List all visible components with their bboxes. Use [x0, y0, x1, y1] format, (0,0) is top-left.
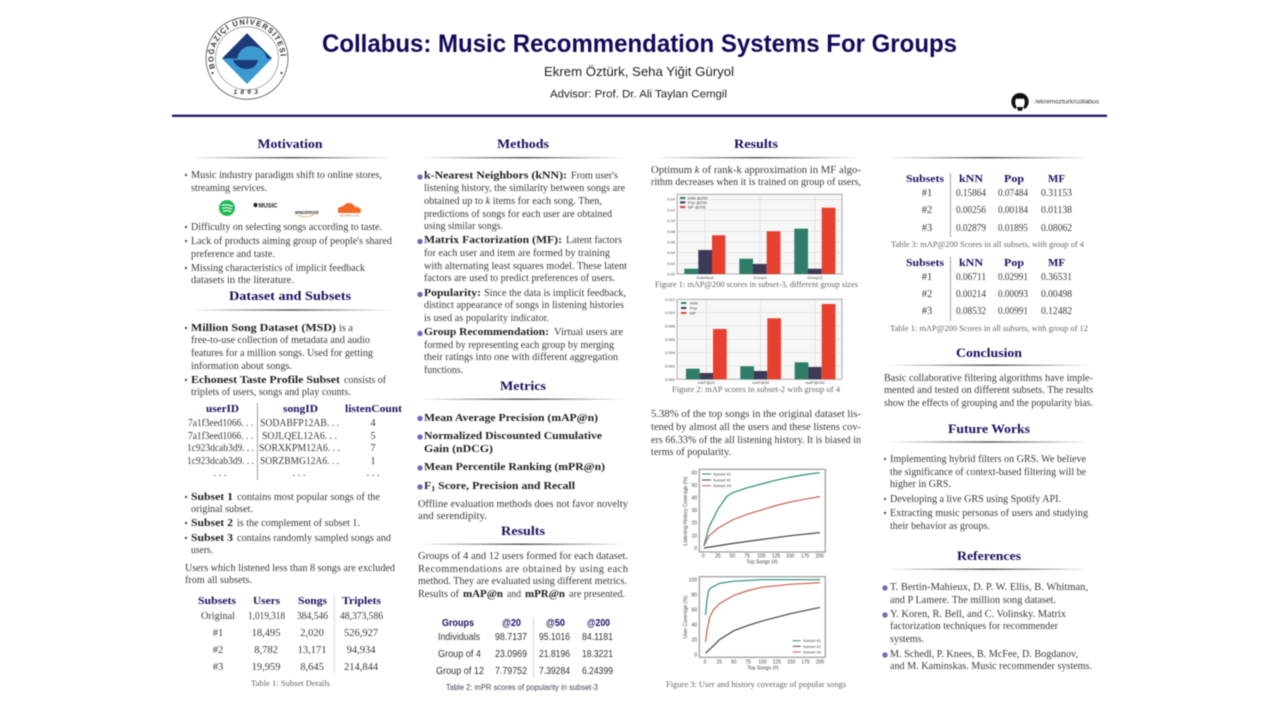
- text block: motivation bullets: [185, 170, 393, 286]
- heading: Motivation: Motivation: [258, 137, 323, 151]
- caption: table 1: Table 1: Subset Details: [251, 678, 330, 688]
- table: triplets sample: 5: [370, 431, 376, 442]
- line chart: user coverage: 100: [689, 578, 697, 584]
- table: subset details: 48,373,586: [340, 611, 383, 622]
- text block: results summary: [418, 551, 629, 600]
- bar chart: figure 1: Individual: [697, 275, 714, 280]
- panel: column 4: [882, 157, 1093, 672]
- caption: figure 1: Figure 1: mAP@200 scores in subset-3, different group sizes: [655, 279, 858, 289]
- bar chart: figure 2: 0.000: [665, 377, 676, 382]
- table: mAP scores group of 12: 0.00498: [1041, 289, 1072, 300]
- icon: GitHub: [1011, 93, 1029, 111]
- bar chart: figure 1: 0.00: [667, 272, 676, 276]
- panel: column 2: [417, 137, 629, 692]
- table: mPR scores: 7.39284: [539, 666, 570, 677]
- table: mAP scores group of 12: Subsets: [906, 258, 944, 269]
- line chart: listening history coverage: Subset #1: [713, 472, 732, 476]
- bar chart: figure 2: 0.002: [665, 364, 676, 368]
- table: subset details: 18,495: [252, 628, 280, 639]
- bar chart: figure 2: kNN: [690, 300, 698, 306]
- table: triplets sample: 1: [370, 456, 376, 467]
- table: subset details: Subsets: [198, 596, 236, 607]
- table: subset details: 13,171: [298, 645, 326, 656]
- table: mAP scores group of 4: 0.01138: [1041, 205, 1072, 216]
- table: mPR scores: Groups: [442, 618, 474, 629]
- line chart: user coverage: Top Songs (#): [747, 666, 779, 672]
- line chart: user coverage: Subset #3: [803, 650, 822, 654]
- table: triplets sample: listenCount: [345, 404, 403, 415]
- table: triplets sample: . . .: [292, 468, 306, 479]
- text block: methods list: Since the data is implicit feedback,: [484, 288, 626, 299]
- table: mPR scores: 23.0969: [495, 649, 527, 660]
- table: mAP scores group of 12: Pop: [1004, 258, 1024, 269]
- text block: results summary: and: [507, 589, 522, 600]
- icon: Amazon Music: amazonmusic: [295, 210, 319, 216]
- text block: methods list: Matrix Factorization (MF):: [424, 235, 562, 246]
- text block: references list: systems.: [890, 634, 924, 645]
- table: mAP scores group of 4: 0.15864: [956, 188, 987, 199]
- text block: future works bullets: Implementing hybrid filters on GRS. We believe: [890, 454, 1086, 465]
- table: mAP scores group of 12: 0.12482: [1041, 306, 1072, 317]
- text block: results summary: Recommendations are obtained by using each: [418, 564, 629, 575]
- line chart: listening history coverage: 125: [772, 554, 780, 560]
- table: subset details: Original: [201, 611, 235, 622]
- line chart: user coverage: Subset #1: [803, 638, 822, 643]
- text block: methods list: Virtual users are: [554, 327, 623, 338]
- text block: results summary: mAP@n: [463, 589, 503, 600]
- heading: Methods: Methods: [497, 137, 549, 151]
- line chart: user coverage: 75: [745, 660, 751, 666]
- table: mAP scores group of 4: MF: [1048, 174, 1065, 185]
- line chart: user coverage: 40: [691, 622, 697, 628]
- text block: dataset bullets: free-to-use collection of metadata and audio: [191, 335, 370, 346]
- text block: subset bullets: Subset 1: [191, 492, 233, 503]
- text block: dataset bullets: information about songs.: [191, 361, 292, 372]
- line chart: listening history coverage: 0: [702, 554, 705, 560]
- text block: motivation bullets: Missing characteristics of implicit feedback: [191, 263, 366, 274]
- table: triplets sample: SOJLQEL12A6. . .: [262, 431, 337, 442]
- text block: subset bullets: Subset 3: [191, 533, 233, 544]
- bar chart: figure 1: 0.04: [667, 250, 676, 255]
- text block: dataset bullets: Million Song Dataset (MSD): [191, 323, 337, 334]
- line chart: user coverage: 60: [691, 608, 697, 614]
- text block: exclusion note: Users which listened less than 8 songs are excluded: [185, 563, 396, 574]
- text block: methods list: Latent factors: [566, 235, 622, 246]
- repo link: /ekremozturk/collabus: [1035, 98, 1100, 105]
- line chart: user coverage: User Coverage (%): [683, 595, 689, 638]
- text block: future works bullets: [884, 454, 1089, 532]
- text block: methods list: predictions of songs for each user are obtained: [424, 209, 613, 220]
- line chart: user coverage: 100: [758, 660, 767, 666]
- bar chart: figure 1: 0.08: [667, 229, 676, 234]
- table: mPR scores: Group of 4: [438, 649, 481, 660]
- table: mAP scores group of 12: #3: [922, 306, 932, 317]
- text block: popularity bias: [651, 409, 862, 458]
- text block: conclusion: mented and tested on different subsets. The results: [884, 385, 1093, 396]
- table: mAP scores group of 4: Pop: [1004, 174, 1024, 185]
- panel: column 1: [185, 137, 403, 688]
- line chart: user coverage: Subset #2: [803, 644, 822, 649]
- table: mAP scores group of 4: 0.00256: [956, 205, 986, 216]
- table: mPR scores: 7.79752: [495, 666, 527, 677]
- logo: Bogazici University seal: BOĞAZİÇİ ÜNİVERSİTESİ: [206, 17, 288, 70]
- line chart: user coverage: 175: [801, 660, 810, 666]
- table: mAP scores group of 4: 0.08062: [1041, 223, 1072, 234]
- table: mAP scores group of 4: 0.00184: [998, 205, 1029, 216]
- text block: dataset bullets: features for a million songs. Used for getting: [191, 348, 374, 359]
- text block: dataset bullets: Echonest Taste Profile Subset: [191, 375, 341, 386]
- bar chart: figure 2: Pop: [690, 306, 698, 310]
- text block: methods list: with alternating least squares model. These latent: [424, 261, 627, 272]
- bar chart: figure 1: 0.14: [667, 196, 676, 202]
- text block: references list: Y. Koren, R. Bell, and C. Volinsky. Matrix: [890, 609, 1067, 620]
- table: subset details: Triplets: [342, 596, 381, 607]
- bar chart: figure 1: 0.12: [667, 208, 676, 212]
- line chart: listening history coverage: 175: [801, 554, 809, 560]
- authors: Ekrem Öztürk, Seha Yiğit Güryol: [544, 64, 734, 79]
- text block: subset bullets: contains randomly sampled songs and: [237, 533, 392, 544]
- bar chart: figure 1: Group4: [753, 275, 767, 280]
- line chart: user coverage: [683, 577, 825, 672]
- table: triplets sample: . . .: [366, 468, 380, 479]
- text block: subset bullets: original subset.: [191, 504, 253, 515]
- table: mPR scores: @50: [546, 618, 565, 629]
- heading: References: References: [957, 549, 1021, 563]
- text block: motivation bullets: preference and taste.: [191, 249, 275, 260]
- text block: methods list: k-Nearest Neighbors (kNN):: [424, 170, 567, 182]
- text block: subset bullets: Subset 2: [191, 518, 233, 529]
- table: mAP scores group of 4: #3: [922, 223, 932, 234]
- line chart: listening history coverage: 60: [691, 470, 697, 476]
- title: Collabus: Music Recommendation Systems For Groups: [322, 30, 957, 58]
- table: mPR scores: @200: [587, 618, 610, 629]
- bar chart: figure 2: mAP@20: [698, 380, 716, 385]
- text block: future works bullets: Developing a live GRS using Spotify API.: [890, 494, 1061, 505]
- text block: results summary: are presented.: [569, 589, 625, 600]
- text block: metrics list: 1: [431, 485, 436, 493]
- line chart: listening history coverage: 75: [744, 554, 750, 560]
- text block: methods list: functions.: [424, 365, 463, 376]
- table: subset details: 214,844: [344, 662, 379, 673]
- table: mPR scores: 84.1181: [582, 632, 613, 643]
- text block: metrics list: Mean Percentile Ranking (mPR@n): [424, 462, 606, 473]
- text block: future works bullets: the significance of context-based filtering will be: [890, 467, 1086, 478]
- text block: metrics list: F: [424, 481, 430, 492]
- heading: Dataset and Subsets: Dataset and Subsets: [229, 289, 351, 303]
- text block: motivation bullets: Difficulty on selecting songs according to taste.: [191, 222, 382, 233]
- text block: future works bullets: higher in GRS.: [890, 479, 951, 490]
- bar chart: figure 1: Group12: [807, 275, 824, 280]
- table: mAP scores group of 12: 0.36531: [1041, 272, 1072, 283]
- text block: future works bullets: their behavior as groups.: [890, 521, 990, 532]
- text block: optimum k: rithm decreases when it is trained on group of users,: [651, 177, 861, 188]
- table: mPR scores: @20: [502, 618, 521, 629]
- table: mPR scores: 98.7137: [495, 632, 527, 643]
- table: mPR scores: Individuals: [438, 632, 480, 643]
- text block: motivation bullets: streaming services.: [191, 183, 267, 194]
- text block: subset bullets: contains most popular songs of the: [237, 492, 380, 503]
- table: subset details: Users: [253, 596, 280, 607]
- table: triplets sample: songID: [283, 404, 318, 415]
- table: mAP scores group of 4: 0.02879: [956, 223, 986, 234]
- bar chart: figure 2: 0.012: [665, 297, 676, 302]
- table: mPR scores: 95.1016: [539, 632, 570, 643]
- text block: methods list: Popularity:: [424, 288, 481, 299]
- line chart: listening history coverage: 100: [757, 554, 766, 560]
- table: triplets sample: [187, 403, 403, 480]
- text block: offline evaluation note: and serendipity.: [418, 511, 487, 522]
- icon: Amazon Music: [295, 210, 319, 217]
- text block: methods list: their ratings into one with different aggregation: [424, 352, 619, 363]
- heading: Results: Results: [501, 524, 545, 538]
- bar chart: figure 1: Pop @200: [688, 200, 708, 205]
- icon: SoundCloud: [338, 203, 361, 218]
- table: mAP scores group of 4: 0.01895: [998, 223, 1028, 234]
- table: subset details: Songs: [298, 596, 327, 607]
- caption: table 4: Table 1: mAP@200 Scores in all subsets, with group of 12: [890, 323, 1088, 333]
- text block: results summary: Results of: [418, 589, 459, 600]
- text block: metrics list: [417, 413, 606, 493]
- table: triplets sample: userID: [206, 404, 239, 415]
- icon: Spotify: [219, 200, 235, 216]
- line chart: listening history coverage: 50: [691, 483, 697, 489]
- text block: results summary: Groups of 4 and 12 users formed for each dataset.: [418, 551, 628, 562]
- text block: motivation bullets: datasets in the literature.: [191, 275, 294, 286]
- icon: SoundCloud: SOUNDCLOUD: [340, 214, 360, 218]
- heading: Future Works: Future Works: [948, 422, 1030, 436]
- text block: conclusion: show the effects of grouping and the popularity bias.: [884, 398, 1093, 409]
- text block: methods list: distinct appearance of songs in listening histories: [424, 300, 624, 311]
- table: subset details: #3: [213, 662, 223, 673]
- table: triplets sample: 4: [370, 418, 376, 429]
- line chart: user coverage: 50: [731, 660, 737, 666]
- text block: optimum k: Optimum k of rank-k approximation in MF algo-: [651, 165, 862, 176]
- text block: motivation bullets: Music industry paradigm shift to online stores,: [191, 170, 382, 181]
- text block: references list: and M. Kaminskas. Music recommender systems.: [890, 661, 1092, 672]
- line chart: listening history coverage: 20: [691, 521, 697, 527]
- table: mAP scores group of 4: 0.31153: [1041, 188, 1072, 199]
- table: mAP scores group of 12: #1: [922, 272, 932, 283]
- line chart: listening history coverage: Top Songs (#): [746, 560, 778, 566]
- table: mAP scores group of 12: 0.06711: [956, 272, 986, 283]
- table: triplets sample: 7a1f3eed1066. . .: [188, 418, 253, 429]
- text block: conclusion: Basic collaborative filtering algorithms have imple-: [884, 373, 1093, 384]
- icon: Apple Music: MUSIC: [258, 202, 278, 210]
- line chart: user coverage: 150: [787, 660, 796, 666]
- caption: figure 3: Figure 3: User and history coverage of popular songs: [666, 679, 846, 689]
- table: mAP scores group of 12: kNN: [959, 258, 983, 269]
- text block: methods list: Group Recommendation:: [424, 327, 549, 338]
- table: mAP scores group of 4: #2: [922, 205, 932, 216]
- heading: Metrics: Metrics: [500, 379, 546, 393]
- table: subset details: 8,782: [254, 645, 278, 656]
- bar chart: figure 1: 0.02: [667, 261, 676, 266]
- text block: exclusion note: from all subsets.: [185, 575, 252, 586]
- table: mAP scores group of 12: 0.02991: [998, 272, 1028, 283]
- text block: references list: and P Lamere. The million song dataset.: [890, 595, 1056, 606]
- line chart: listening history coverage: [683, 469, 825, 566]
- text block: subset bullets: is the complement of subset 1.: [237, 518, 360, 529]
- table: triplets sample: 7: [370, 443, 376, 454]
- table: subset details: #1: [213, 628, 223, 639]
- table: triplets sample: 1c923dcab3d9. . .: [187, 456, 254, 467]
- table: mPR scores: 18.3221: [582, 649, 613, 660]
- line chart: listening history coverage: 30: [691, 508, 697, 514]
- text block: offline evaluation note: Offline evaluation methods does not favor novelty: [418, 499, 629, 510]
- line chart: listening history coverage: Subset #2: [713, 478, 732, 482]
- bar chart: figure 2: MF: [690, 310, 696, 316]
- table: mPR scores: 6.24399: [582, 666, 613, 677]
- text block: dataset bullets: consists of: [344, 375, 386, 386]
- caption: figure 2: Figure 2: mAP scores in subset-2 with group of 4: [672, 384, 841, 394]
- bar chart: figure 2: [665, 297, 842, 385]
- table: triplets sample: 7a1f3eed1066. . .: [188, 431, 253, 442]
- panel: column 3: [651, 137, 862, 689]
- table: mAP scores group of 12: MF: [1048, 258, 1065, 269]
- text block: future works bullets: Extracting music personas of users and studying: [890, 508, 1089, 519]
- bar chart: figure 2: mAP@50: [752, 380, 770, 385]
- text block: metrics list: Gain (nDCG): [424, 444, 494, 455]
- table: triplets sample: SORXKPM12A6. . .: [259, 443, 340, 454]
- bar chart: figure 1: MF @200: [688, 204, 706, 210]
- table: mAP scores group of 12: 0.00991: [998, 306, 1028, 317]
- line chart: user coverage: 125: [773, 660, 781, 666]
- text block: references list: T. Bertin-Mahieux, D. P. W. Ellis, B. Whitman,: [890, 582, 1088, 593]
- text block: methods list: formed by representing each group by merging: [424, 340, 615, 351]
- text block: methods list: [417, 170, 627, 376]
- bar chart: figure 2: 0.006: [665, 337, 676, 342]
- bar chart: figure 1: kNN @200: [688, 196, 708, 200]
- text block: methods list: using similar songs.: [424, 221, 503, 232]
- caption: table 2: Table 2: mPR scores of popularity in subset-3: [446, 683, 599, 692]
- bar chart: figure 2: 0.010: [665, 310, 676, 315]
- table: mPR scores: [436, 617, 613, 678]
- text block: subset bullets: [185, 492, 392, 556]
- text block: popularity bias: ers 66.33% of the all listening history. It is biased in: [651, 435, 862, 446]
- text block: popularity bias: 5.38% of the top songs in the original dataset lis-: [651, 409, 862, 420]
- line chart: listening history coverage: 40: [691, 496, 697, 502]
- line chart: listening history coverage: 10: [691, 534, 697, 540]
- line chart: user coverage: 20: [691, 638, 697, 644]
- text block: references list: M. Schedl, P. Knees, B. McFee, D. Bogdanov,: [890, 649, 1078, 660]
- table: mAP scores group of 12: #2: [922, 289, 932, 300]
- text block: dataset bullets: triplets of users, songs and play counts.: [191, 387, 351, 398]
- line chart: listening history coverage: 50: [730, 554, 735, 560]
- table: triplets sample: 1c923dcab3d9. . .: [187, 443, 254, 454]
- text block: references list: factorization techniques for recommender: [890, 621, 1058, 632]
- heading: Results: Results: [734, 137, 778, 151]
- text block: optimum k: [651, 165, 862, 188]
- text block: subset bullets: users.: [191, 545, 213, 556]
- table: subset details: 2,020: [300, 628, 324, 639]
- table: subset details: 19,959: [252, 662, 280, 673]
- text block: methods list: factors are used to predict preferences of users.: [424, 273, 615, 284]
- table: mAP scores group of 4: #1: [922, 188, 932, 199]
- text block: metrics list: Mean Average Precision (mAP@n): [424, 413, 599, 424]
- table: mAP scores group of 4: [906, 173, 1072, 237]
- line chart: listening history coverage: 0: [694, 546, 697, 552]
- line chart: listening history coverage: 200: [816, 554, 824, 560]
- text block: popularity bias: tened by almost all the users and these listens cov-: [651, 422, 861, 433]
- bar chart: figure 1: 0.10: [667, 218, 676, 223]
- table: subset details: #2: [213, 645, 223, 656]
- table: mAP scores group of 12: [906, 257, 1072, 321]
- table: mAP scores group of 4: Subsets: [906, 174, 944, 185]
- text block: methods list: obtained up to k items for each song. Then,: [424, 196, 602, 207]
- text block: results summary: mPR@n: [525, 589, 565, 600]
- table: mAP scores group of 12: 0.08532: [956, 306, 986, 317]
- logo: Bogazici University seal: [204, 16, 290, 100]
- table: triplets sample: SODABFP12AB. . .: [260, 418, 339, 429]
- text block: methods list: From user's: [571, 170, 618, 182]
- text block: exclusion note: [185, 563, 396, 586]
- table: mAP scores group of 4: 0.07484: [998, 188, 1029, 199]
- header rule: [172, 115, 1107, 117]
- table: mAP scores group of 4: kNN: [959, 174, 983, 185]
- table: subset details: [198, 595, 383, 673]
- bar chart: figure 1: [667, 194, 842, 280]
- heading: Conclusion: Conclusion: [956, 346, 1022, 360]
- table: mPR scores: 21.8196: [539, 649, 570, 660]
- text block: conclusion: [884, 373, 1093, 409]
- table: mAP scores group of 12: 0.00093: [998, 289, 1028, 300]
- bar chart: figure 2: mAP@200: [805, 380, 825, 385]
- table: triplets sample: SORZBMG12A6. . .: [260, 456, 339, 467]
- line chart: user coverage: 25: [717, 660, 722, 666]
- line chart: listening history coverage: 150: [786, 554, 795, 560]
- advisor: Advisor: Prof. Dr. Ali Taylan Cemgil: [550, 88, 727, 100]
- text block: dataset bullets: is a: [339, 323, 353, 334]
- bar chart: figure 2: 0.008: [665, 324, 676, 328]
- line chart: listening history coverage: 25: [715, 554, 721, 560]
- line chart: user coverage: 0: [694, 652, 697, 658]
- bar chart: figure 2: 0.004: [665, 350, 676, 355]
- table: mPR scores: Group of 12: [436, 666, 484, 677]
- header: [204, 16, 1100, 112]
- text block: offline evaluation note: [418, 499, 629, 522]
- text block: methods list: is used as popularity indicator.: [424, 313, 549, 324]
- line chart: user coverage: 200: [816, 660, 824, 666]
- text block: results summary: method. They are evaluated using different metrics.: [418, 576, 627, 587]
- table: triplets sample: . . .: [213, 468, 227, 479]
- line chart: listening history coverage: Subset #3: [713, 483, 732, 488]
- line chart: listening history coverage: Listening History Coverage (%): [683, 476, 689, 546]
- line chart: user coverage: 80: [691, 592, 697, 598]
- text block: methods list: listening history, the similarity between songs are: [424, 183, 625, 194]
- text block: dataset bullets: [185, 323, 386, 398]
- logo: Bogazici University seal: 1863: [234, 89, 261, 96]
- text block: metrics list: Normalized Discounted Cumulative: [424, 431, 602, 442]
- text block: motivation bullets: Lack of products aiming group of people's shared: [191, 236, 393, 247]
- text block: popularity bias: terms of popularity.: [651, 447, 731, 458]
- table: subset details: 526,927: [344, 628, 378, 639]
- bar chart: figure 1: 0.06: [667, 240, 676, 244]
- table: subset details: 8,645: [300, 662, 324, 673]
- line chart: user coverage: 0: [704, 660, 707, 666]
- text block: references list: [882, 582, 1092, 672]
- text block: methods list: for each user and item are formed by training: [424, 248, 611, 259]
- caption: table 3: Table 3: mAP@200 Scores in all subsets, with group of 4: [891, 239, 1085, 249]
- table: mAP scores group of 12: 0.00214: [956, 289, 987, 300]
- table: subset details: 1,019,318: [248, 611, 285, 622]
- text block: metrics list: Score, Precision and Recall: [435, 481, 575, 492]
- table: subset details: 94,934: [347, 645, 376, 656]
- table: subset details: 384,546: [297, 611, 328, 622]
